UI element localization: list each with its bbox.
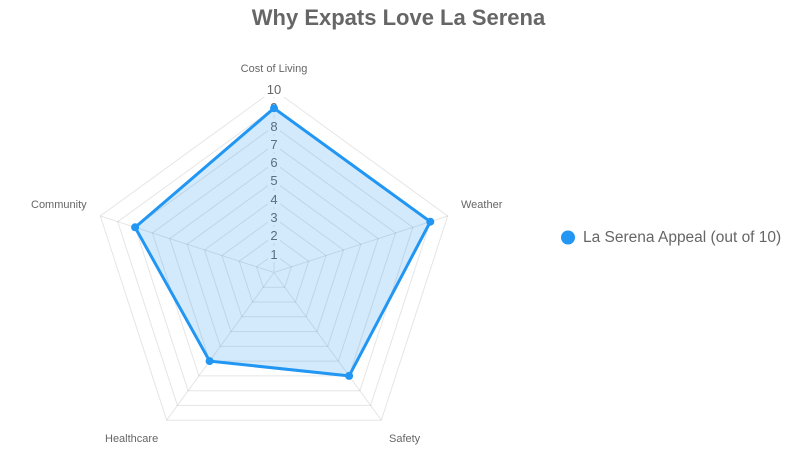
title: Why Expats Love La Serena [252,5,546,30]
axis labels: Weather [461,199,503,211]
data series: La Serena Appeal [131,104,434,380]
axis tick labels: 9 [270,100,278,115]
legend marker [561,230,575,244]
data area [135,108,430,376]
axis tick labels [264,81,284,262]
radar grid [100,90,448,420]
axis tick labels: 6 [270,155,278,170]
axis tick labels: 3 [270,210,278,225]
data points [131,104,434,380]
axis labels: Community [31,199,87,211]
axis tick labels: 7 [270,137,278,152]
axis tick labels: 10 [267,82,281,97]
axis tick labels: 1 [270,247,278,262]
axis labels: Healthcare [105,433,158,445]
axis tick labels: 4 [270,192,278,207]
axis labels [31,63,503,445]
axis labels: Cost of Living [241,63,307,75]
legend label: La Serena Appeal (out of 10) [583,229,781,246]
axis tick labels: 8 [270,119,278,134]
legend [561,229,781,246]
axis tick labels: 2 [270,228,278,243]
axis tick labels: 5 [270,173,278,188]
axis labels: Safety [389,433,421,445]
